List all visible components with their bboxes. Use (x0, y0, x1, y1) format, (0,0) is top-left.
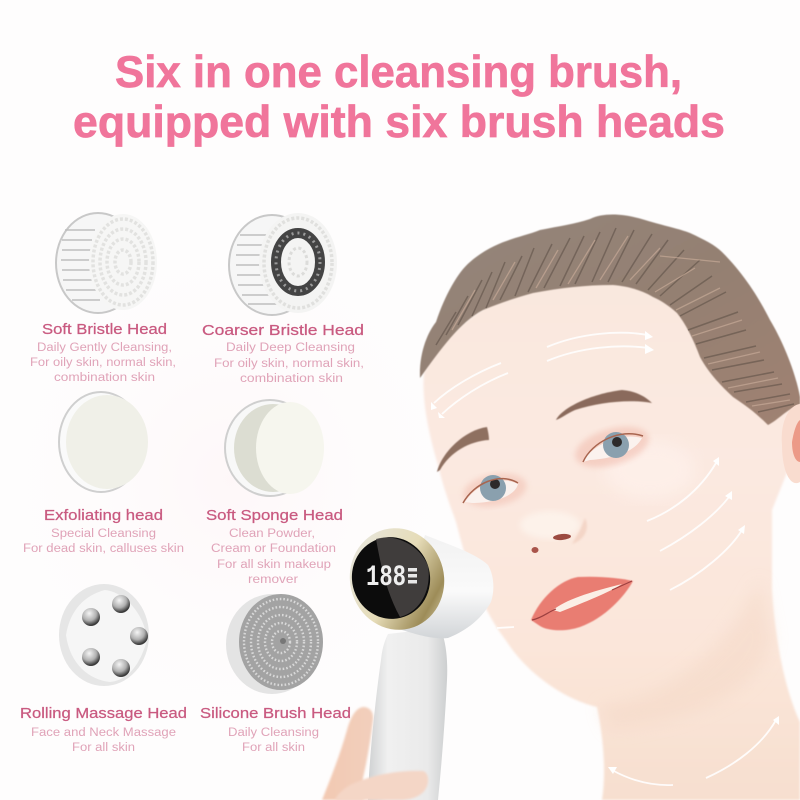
description: remover (248, 574, 298, 586)
icon: coarser bristle brush (229, 213, 337, 315)
screen reflection (376, 537, 429, 617)
hand: finger behind device (322, 707, 373, 800)
forehead and cheek highlight (605, 440, 695, 500)
description: For all skin makeup (217, 559, 331, 571)
description: For oily skin, normal skin, (214, 358, 364, 370)
portrait: woman's face with massage arrows (420, 215, 800, 800)
nose (520, 511, 587, 553)
description: Daily Deep Cleansing (226, 342, 355, 354)
left eyebrow (437, 427, 489, 472)
description: For all skin (72, 742, 135, 754)
panel: silicone brush head (200, 594, 351, 754)
icon: silicone brush (226, 594, 323, 694)
description: combination skin (54, 372, 155, 384)
heading: Soft Sponge Head (206, 507, 343, 524)
description: Special Cleansing (51, 528, 156, 540)
panel: rolling massage head (20, 584, 187, 754)
description (30, 342, 176, 384)
heading: Soft Bristle Head (42, 321, 167, 338)
panel: exfoliating head (23, 392, 184, 555)
heading: Silicone Brush Head (200, 705, 351, 722)
description: Face and Neck Massage (31, 727, 176, 739)
panel: coarser bristle head (202, 213, 364, 385)
title (73, 48, 725, 147)
lips (531, 577, 633, 630)
jaw shadow (600, 580, 772, 730)
description (214, 342, 364, 385)
description (228, 727, 319, 754)
title: equipped with six brush heads (73, 98, 725, 147)
heading: Exfoliating head (44, 507, 163, 524)
icon: sponge (225, 400, 324, 496)
heading: Rolling Massage Head (20, 705, 187, 722)
icon: exfoliating pad (59, 392, 148, 492)
panel: soft bristle head (30, 213, 176, 384)
description (211, 528, 336, 586)
skin: face and neck (424, 270, 800, 800)
hair (420, 215, 800, 425)
description: Daily Cleansing (228, 727, 319, 739)
handle (368, 628, 447, 800)
device: cleansing brush (335, 518, 493, 800)
description (23, 528, 184, 555)
panel: soft sponge head (206, 400, 343, 586)
right eye (571, 419, 653, 475)
brush body cylinder (395, 535, 493, 638)
gold ring (339, 518, 455, 640)
title: Six in one cleansing brush, (115, 48, 682, 97)
description: Cream or Foundation (211, 543, 336, 555)
description (31, 727, 176, 754)
description: For all skin (242, 742, 305, 754)
massage arrows (434, 333, 776, 785)
description: Clean Powder, (229, 528, 315, 540)
description: combination skin (240, 373, 343, 385)
left eye (461, 469, 529, 511)
screen (343, 529, 439, 627)
thumb over handle (335, 771, 428, 800)
arrow heads (431, 331, 779, 774)
icon: massage rollers (59, 584, 149, 686)
icon: soft bristle brush (56, 213, 157, 313)
description: Daily Gently Cleansing, (37, 342, 172, 354)
description: For oily skin, normal skin, (30, 357, 176, 369)
heading: Coarser Bristle Head (202, 322, 364, 339)
digital display: 188 (366, 561, 406, 595)
ear (782, 404, 800, 483)
description: For dead skin, calluses skin (23, 543, 184, 555)
right eyebrow (556, 390, 652, 420)
